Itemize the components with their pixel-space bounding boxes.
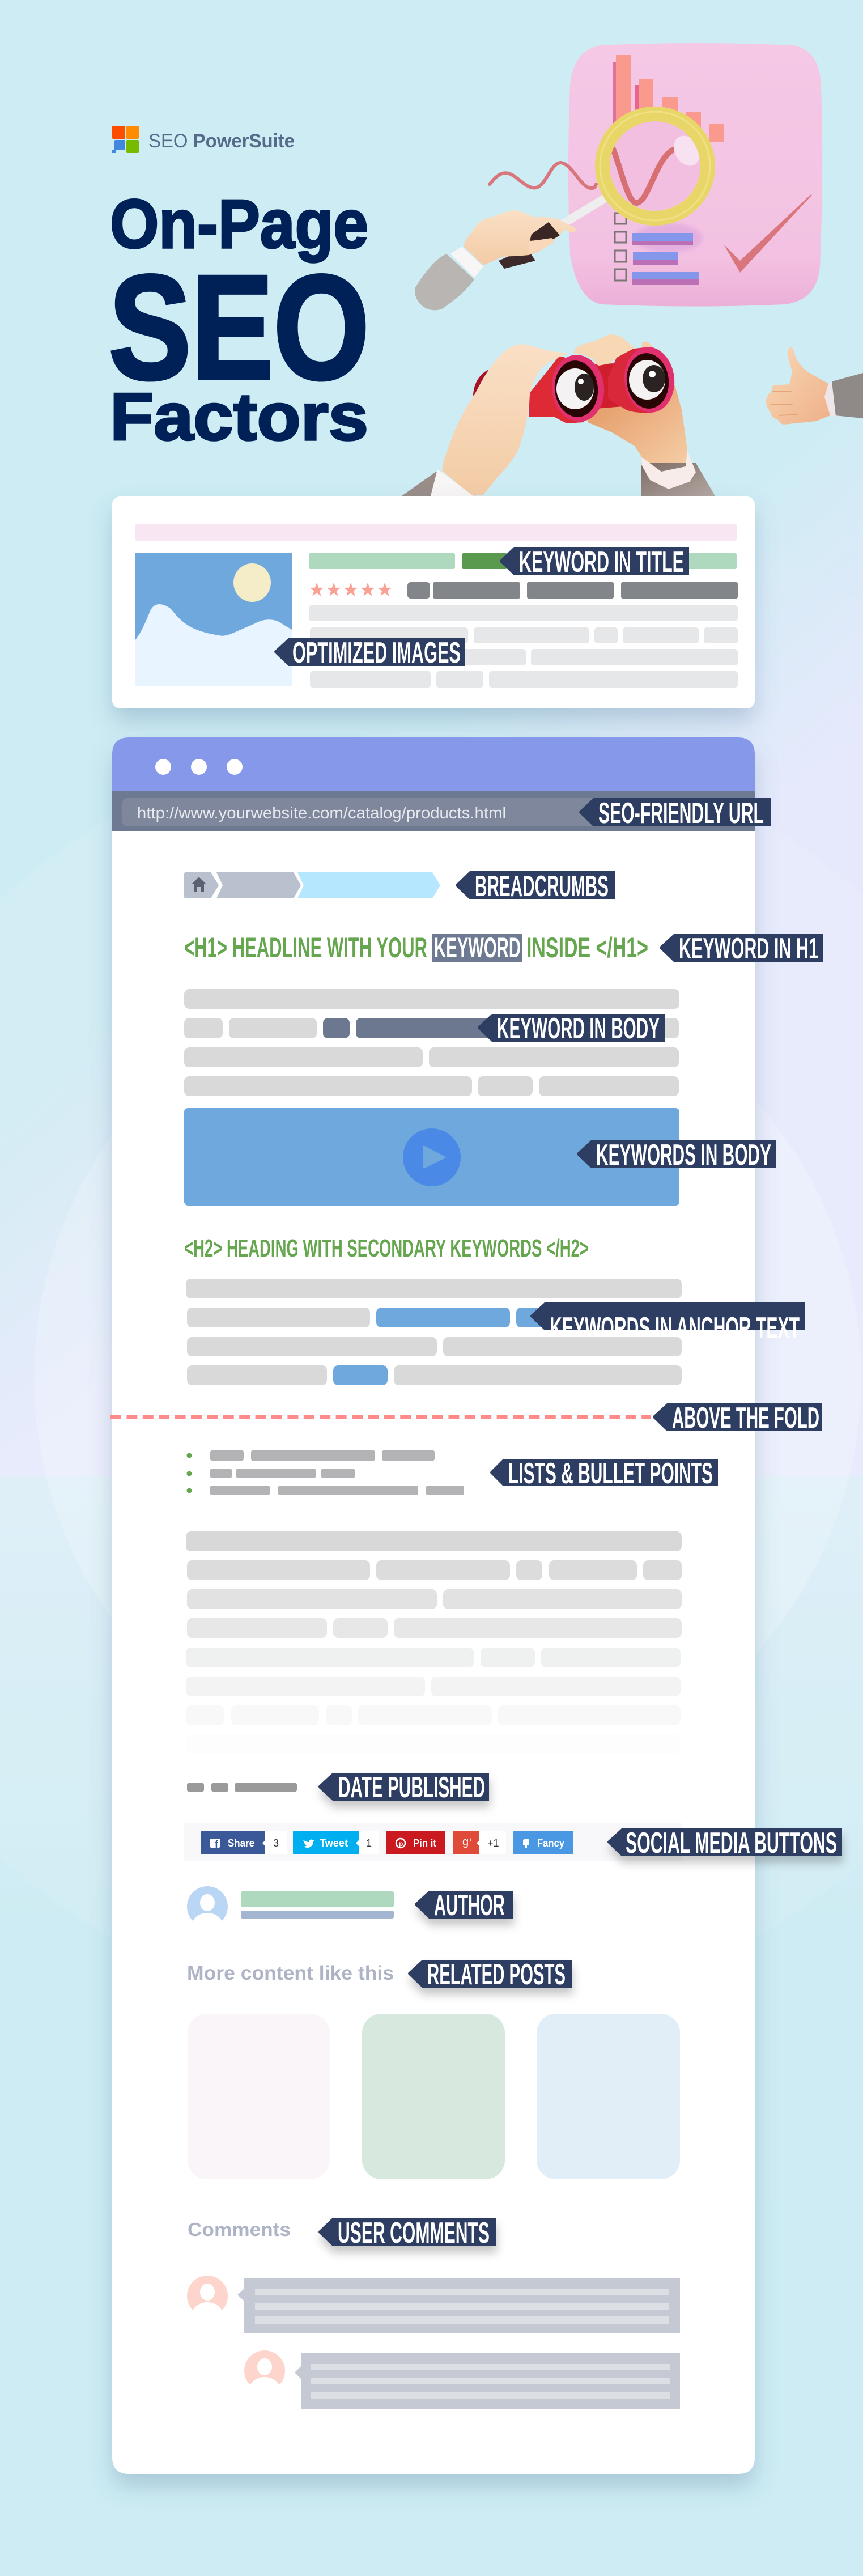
title: On-Page SEO Factors: Factors xyxy=(110,380,368,455)
label: user comments: USER COMMENTS xyxy=(338,2217,490,2250)
google plus button xyxy=(453,1831,506,1854)
url text: http://www.yourwebsite.com/catalog/products.html xyxy=(137,804,506,822)
pin it button xyxy=(386,1831,445,1854)
panel: browser window xyxy=(112,737,755,2474)
label: breadcrumbs: BREADCRUMBS xyxy=(475,870,609,903)
breadcrumbs xyxy=(184,872,440,898)
title: On-Page SEO Factors xyxy=(109,185,369,455)
share button: f xyxy=(215,1839,219,1850)
illustration: hands with binoculars xyxy=(402,334,715,496)
label: breadcrumbs xyxy=(456,870,615,903)
label: seo-friendly url xyxy=(579,797,771,830)
comment 2 xyxy=(241,2350,680,2409)
label: author: AUTHOR xyxy=(434,1889,505,1922)
label: optimized images xyxy=(274,636,465,669)
fancy button: Fancy xyxy=(537,1837,564,1849)
body text block xyxy=(184,989,679,1096)
panel: search result snippet card xyxy=(112,496,755,708)
logo: SEO PowerSuite xyxy=(112,126,295,153)
tweet button: Tweet xyxy=(320,1837,348,1849)
share button xyxy=(201,1831,287,1854)
h1 headline: KEYWORD xyxy=(434,932,521,964)
pin it button: p xyxy=(399,1840,403,1848)
illustration: hand holding magnifying glass xyxy=(415,112,710,310)
anchor text block lower rows xyxy=(187,1337,682,1385)
label: keywords in body xyxy=(577,1139,776,1172)
label: keyword in body: KEYWORD IN BODY xyxy=(497,1012,660,1045)
author block xyxy=(184,1886,394,1940)
label: optimized images: OPTIMIZED IMAGES xyxy=(292,636,461,669)
tweet button: 1 xyxy=(366,1837,372,1849)
illustration: thumbs up hand xyxy=(766,347,863,425)
label: lists and bullet points xyxy=(490,1457,718,1490)
share button: Share xyxy=(228,1837,254,1849)
label: lists and bullet points: LISTS & BULLET POINTS xyxy=(508,1457,713,1490)
google plus button: +1 xyxy=(487,1837,499,1849)
video block xyxy=(184,1108,679,1206)
pin it button: Pin it xyxy=(413,1837,436,1849)
related post cards xyxy=(188,2014,680,2179)
share button: 3 xyxy=(273,1837,279,1849)
label: keyword in body xyxy=(478,1012,665,1045)
title: On-Page SEO Factors: On-Page xyxy=(110,185,368,262)
comments heading: Comments xyxy=(188,2219,291,2240)
anchor text block xyxy=(186,1279,682,1327)
title: On-Page SEO Factors: SEO xyxy=(109,244,369,410)
h1 headline: INSIDE </H1> xyxy=(526,932,648,964)
above the fold dashed line xyxy=(110,1415,651,1419)
label: user comments xyxy=(318,2217,496,2250)
label: author xyxy=(415,1889,513,1922)
label: keyword in title xyxy=(500,546,689,579)
label: keyword in title: KEYWORD IN TITLE xyxy=(519,546,684,579)
comment 1 xyxy=(184,2276,680,2333)
label: date published: DATE PUBLISHED xyxy=(338,1771,485,1804)
h1 headline: <H1> HEADLINE WITH YOUR xyxy=(184,932,427,964)
label: keywords in anchor text xyxy=(530,1302,805,1344)
label: related posts: RELATED POSTS xyxy=(427,1958,566,1991)
illustration: pink checklist card with chart xyxy=(490,43,822,306)
h2 heading: <H2> HEADING WITH SECONDARY KEYWORDS </H2> xyxy=(184,1234,589,1262)
bullet list xyxy=(187,1450,464,1495)
date published bars xyxy=(187,1783,297,1792)
tweet button xyxy=(293,1831,379,1854)
fancy button xyxy=(513,1831,573,1854)
google plus button: + xyxy=(469,1837,473,1844)
logo: SEO PowerSuite: SEO PowerSuite xyxy=(148,130,295,152)
label: related posts xyxy=(408,1958,572,1991)
social media buttons xyxy=(184,1823,682,1861)
related posts heading: More content like this xyxy=(187,1962,394,1984)
label: date published xyxy=(318,1771,489,1804)
google plus button: g xyxy=(462,1836,469,1848)
fading body text block xyxy=(186,1531,682,1754)
